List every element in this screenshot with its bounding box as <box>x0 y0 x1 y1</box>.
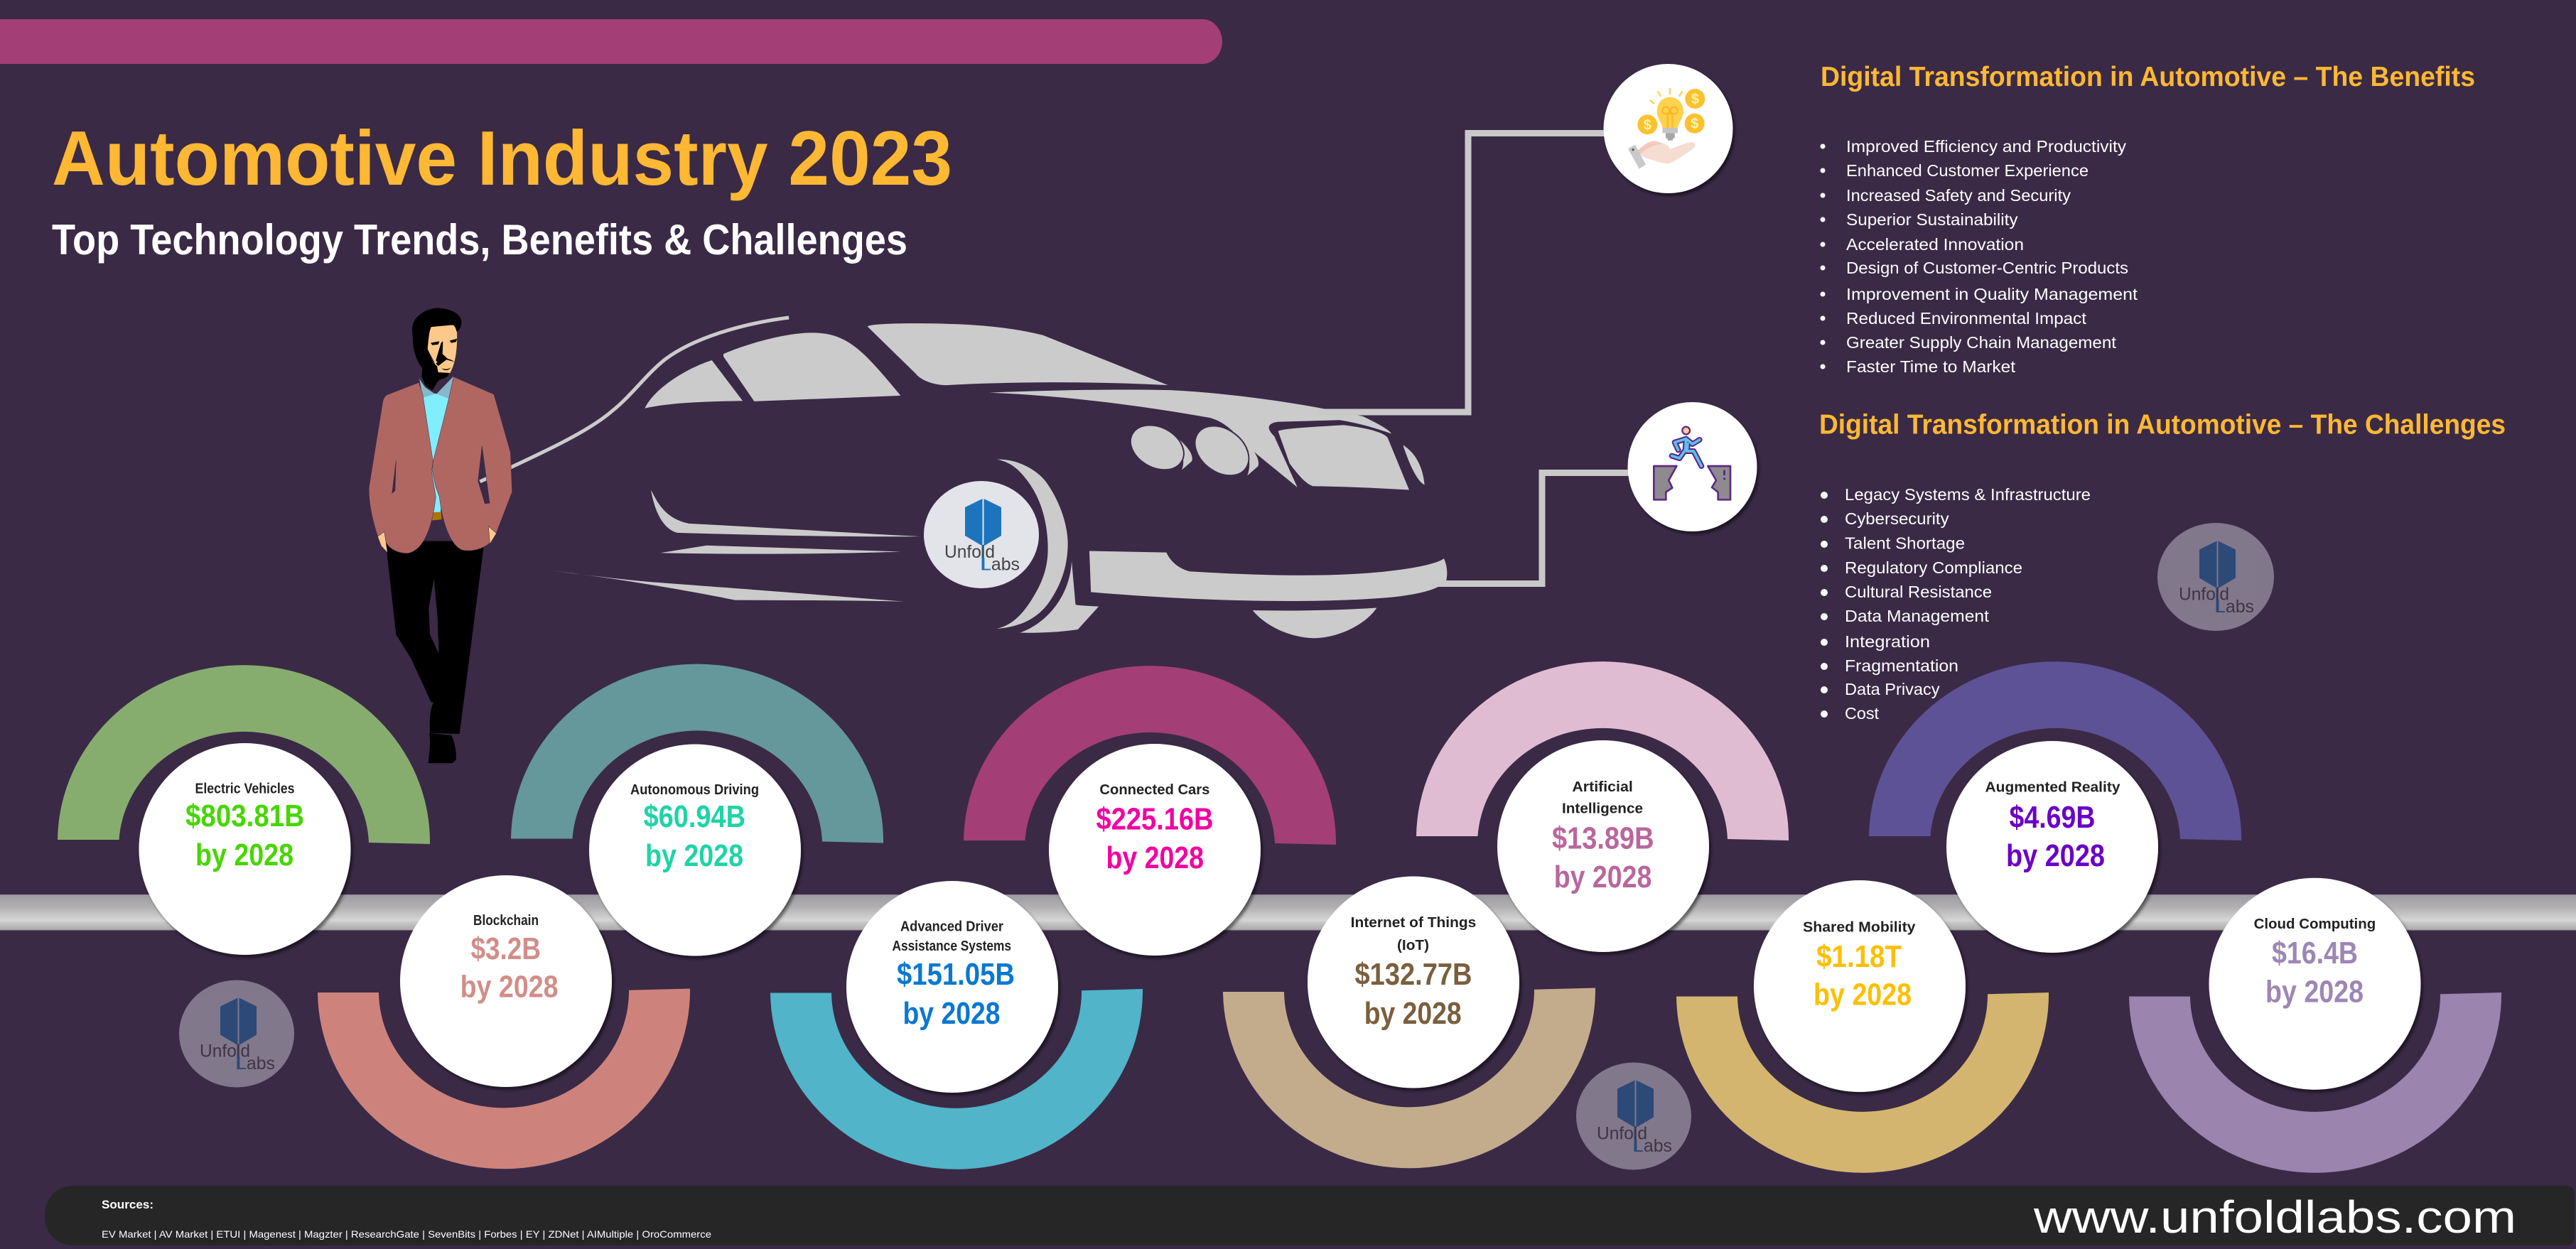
year: by 2028 <box>2006 838 2105 873</box>
circle <box>1049 744 1261 956</box>
label line 2: (IoT) <box>1397 938 1429 953</box>
year: by 2028 <box>1554 860 1651 894</box>
sources list: EV Market | AV Market | ETUI | Magenest | Magzter | ResearchGate | SevenBits | Forbes | EY | ZDNet | AIMultiple | OroCommerce <box>102 1228 711 1240</box>
facial details <box>431 339 457 370</box>
list: benefits: Improvement in Quality Management <box>1846 285 2138 303</box>
card: Augmented Reality <box>1869 661 2241 953</box>
footer bar <box>45 1186 2575 1245</box>
subtitle: Top Technology Trends, Benefits & Challenges <box>52 216 907 264</box>
connector: car to benefits icon <box>1317 134 1606 412</box>
arc <box>1416 661 1789 840</box>
list: challenges: Cultural Resistance <box>1845 583 1992 601</box>
arc <box>770 989 1143 1169</box>
value: $803.81B <box>185 799 304 833</box>
list: challenges <box>1821 485 2091 723</box>
card: Shared Mobility <box>1676 880 2049 1173</box>
list: challenges: Talent Shortage <box>1845 534 1965 553</box>
circle <box>400 875 612 1087</box>
card: Internet of Things <box>1223 877 1595 1168</box>
circle <box>1497 740 1709 952</box>
arc <box>318 989 690 1169</box>
icon: challenges <box>1627 402 1757 531</box>
list: benefits: Increased Safety and Security <box>1846 186 2071 205</box>
watermark logo: lower left: Labs <box>237 1054 275 1074</box>
sources heading: Sources: <box>102 1198 153 1211</box>
watermark logo: lower left: Unfold <box>200 1042 250 1061</box>
value: $3.2B <box>470 931 541 966</box>
label line 1: Artificial <box>1572 779 1633 795</box>
watermark logo: upper right: Labs <box>2216 597 2254 617</box>
jacket right <box>432 377 512 551</box>
card: Cloud Computing <box>2129 878 2501 1173</box>
label line 2: Assistance Systems <box>893 939 1011 954</box>
value: $225.16B <box>1096 802 1214 837</box>
watermark logo: upper right: Unfold <box>2179 584 2229 604</box>
belt <box>431 512 442 521</box>
year: by 2028 <box>1814 978 1912 1012</box>
card: Blockchain <box>318 875 690 1169</box>
list: challenges: Fragmentation <box>1845 656 1958 675</box>
arc <box>1869 661 2241 840</box>
arc <box>58 665 430 844</box>
list: challenges: Integration <box>1845 632 1930 651</box>
value: $151.05B <box>897 957 1015 992</box>
list: benefits: Superior Sustainability <box>1846 210 2018 229</box>
trousers <box>386 541 485 734</box>
arc <box>1676 993 2049 1173</box>
top accent bar <box>0 19 1222 64</box>
list: benefits: Faster Time to Market <box>1846 357 2016 376</box>
year: by 2028 <box>1364 996 1462 1031</box>
watermark logo: lower middle <box>1576 1063 1691 1169</box>
logo: on car wheel: Labs <box>981 554 1020 574</box>
year: by 2028 <box>2265 975 2364 1010</box>
label: Shared Mobility <box>1803 920 1916 936</box>
arc <box>2129 993 2501 1173</box>
card: Artificial Intelligence <box>1416 661 1789 952</box>
car illustration <box>480 318 1447 638</box>
label line 1: Advanced Driver <box>900 919 1003 935</box>
logo: on car wheel <box>924 481 1039 588</box>
icon artwork: runner leaping a gap <box>1654 427 1730 499</box>
circle <box>1308 877 1519 1088</box>
list: challenges: Data Privacy <box>1845 680 1940 698</box>
hands <box>378 526 496 552</box>
value: $1.18T <box>1816 939 1902 974</box>
card: Autonomous Driving <box>511 664 883 956</box>
value: $16.4B <box>2272 936 2358 970</box>
arc <box>511 664 883 843</box>
heading: challenges: Digital Transformation in Automotive – The Challenges <box>1819 410 2506 440</box>
list: benefits: Greater Supply Chain Management <box>1846 333 2117 352</box>
icon circle <box>1627 402 1757 531</box>
face <box>428 325 457 373</box>
watermark logo: upper right <box>2157 523 2274 631</box>
shoe <box>429 733 456 763</box>
collar <box>419 376 453 399</box>
icon artwork: bulb, coins and hand: $ <box>1691 92 1699 107</box>
circle <box>139 743 351 955</box>
list: challenges: Cybersecurity <box>1845 509 1949 528</box>
label: Electric Vehicles <box>195 782 294 797</box>
value: $132.77B <box>1354 957 1472 992</box>
value: $4.69B <box>2010 800 2095 835</box>
pipe band <box>0 894 2576 931</box>
label: Augmented Reality <box>1985 780 2120 796</box>
logo: on car wheel: Unfold <box>944 542 995 562</box>
list: challenges: Cost <box>1845 704 1880 723</box>
card: Advanced Driver Assistance Systems <box>770 881 1143 1169</box>
circle <box>1946 741 2158 953</box>
list: benefits: Design of Customer-Centric Products <box>1846 259 2128 277</box>
heading: benefits: Digital Transformation in Automotive – The Benefits <box>1821 62 2475 92</box>
list: challenges: Regulatory Compliance <box>1845 558 2022 577</box>
jacket left <box>369 382 436 553</box>
watermark logo: lower middle: Unfold <box>1597 1124 1647 1144</box>
list: challenges: Data Management <box>1845 607 1990 625</box>
year: by 2028 <box>1106 840 1204 875</box>
label: Connected Cars <box>1099 782 1209 798</box>
list: benefits: Improved Efficiency and Productivity <box>1846 137 2127 156</box>
card: Electric Vehicles <box>58 665 430 955</box>
man illustration <box>369 308 512 763</box>
shirt <box>422 392 450 512</box>
year: by 2028 <box>460 970 559 1005</box>
circle <box>589 745 801 956</box>
list: challenges: Legacy Systems & Infrastructure <box>1845 485 2091 504</box>
list: benefits: Accelerated Innovation <box>1846 235 2024 254</box>
value: $60.94B <box>644 799 745 834</box>
arc <box>1223 988 1595 1168</box>
card: Connected Cars <box>964 666 1336 956</box>
website: www.unfoldlabs.com <box>2033 1191 2516 1243</box>
circle <box>2209 878 2420 1090</box>
year: by 2028 <box>195 838 293 872</box>
icon circle <box>1603 64 1732 193</box>
connector: car to challenges icon <box>1432 473 1631 584</box>
title: Automotive Industry 2023 <box>52 115 952 202</box>
watermark logo: lower middle: Labs <box>1634 1136 1672 1156</box>
list: benefits: Enhanced Customer Experience <box>1846 161 2089 180</box>
watermark logo: lower left <box>179 980 294 1087</box>
label: Cloud Computing <box>2254 917 2376 932</box>
circle <box>846 881 1058 1093</box>
icon artwork: bulb, coins and hand: $ <box>1644 117 1651 133</box>
hair and beard <box>412 308 461 391</box>
label line 2: Intelligence <box>1562 801 1643 817</box>
icon: benefits <box>1603 64 1732 193</box>
circle <box>1754 880 1966 1092</box>
label: Autonomous Driving <box>630 782 759 798</box>
year: by 2028 <box>645 838 743 873</box>
label: Blockchain <box>473 913 539 929</box>
arc <box>964 666 1336 845</box>
icon artwork: bulb, coins and hand <box>1628 89 1705 169</box>
list: benefits: Reduced Environmental Impact <box>1846 309 2087 328</box>
year: by 2028 <box>902 996 1001 1031</box>
icon artwork: bulb, coins and hand: $ <box>1691 117 1698 132</box>
label line 1: Internet of Things <box>1351 915 1476 931</box>
list: benefits <box>1821 137 2138 376</box>
value: $13.89B <box>1552 821 1654 855</box>
